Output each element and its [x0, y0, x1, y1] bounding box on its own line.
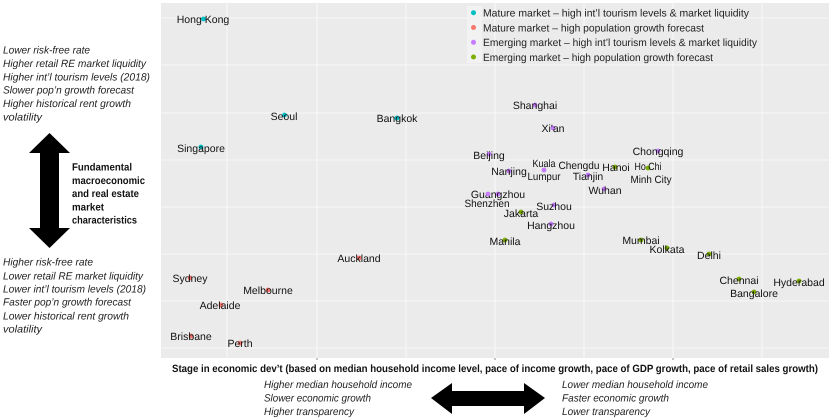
text block: lower end of vertical axis: Lower historical rent growth: [3, 310, 129, 322]
point: Xi'an: Xi'an: [541, 123, 565, 135]
point: Kuala Lumpur: Kuala: [532, 158, 556, 170]
point: Manila: Manila: [490, 236, 521, 248]
arrow: horizontal double-headed: [431, 383, 545, 414]
text block: upper end of vertical axis: Higher historical rent growth: [3, 98, 131, 110]
text block: right end of horizontal axis: [562, 379, 708, 418]
text block: upper end of vertical axis: volatility: [3, 112, 43, 124]
text block: right end of horizontal axis: Lower median household income: [562, 379, 708, 391]
point: Chennai: Chennai: [719, 275, 759, 287]
legend: Emerging market – high int’l tourism levels & market liquidity: [483, 37, 758, 49]
arrow: vertical double-headed: [29, 133, 70, 248]
point: Guangzhou: Guangzhou: [471, 189, 525, 201]
point: Perth: Perth: [227, 338, 253, 350]
text block: left end of horizontal axis: Higher median household income: [264, 379, 412, 391]
point: Seoul: Seoul: [271, 111, 297, 123]
legend: [467, 6, 758, 64]
point: Delhi: Delhi: [697, 250, 721, 262]
point: Melbourne: Melbourne: [243, 285, 293, 297]
point: Adelaide: Adelaide: [200, 300, 241, 312]
point: Nanjing: Nanjing: [491, 166, 527, 178]
text block: upper end of vertical axis: [3, 44, 150, 124]
text block: upper end of vertical axis: Slower pop’n growth forecast: [3, 84, 135, 96]
point: Ho Chi Minh City: Ho Chi: [634, 161, 662, 173]
text block: left end of horizontal axis: [264, 379, 412, 418]
point: Hong Kong: Hong Kong: [177, 14, 229, 26]
text block: vertical axis title: [72, 162, 145, 226]
point: Singapore: Singapore: [177, 143, 225, 155]
text block: lower end of vertical axis: Faster pop’n growth forecast: [3, 296, 132, 308]
text block: upper end of vertical axis: Higher int’l tourism levels (2018): [3, 72, 150, 84]
point: Beijing: Beijing: [473, 150, 505, 162]
text block: upper end of vertical axis: Higher retail RE market liquidity: [3, 58, 147, 70]
text block: upper end of vertical axis: Lower risk-free rate: [3, 44, 90, 56]
point: Ho Chi Minh City: [630, 161, 672, 186]
text block: right end of horizontal axis: Faster economic growth: [562, 392, 669, 404]
point: Brisbane: Brisbane: [170, 331, 212, 343]
text block: lower end of vertical axis: Lower int’l tourism levels (2018): [3, 284, 146, 296]
text block: lower end of vertical axis: Lower retail RE market liquidity: [3, 270, 144, 282]
point: Shenzhen: Shenzhen: [464, 198, 510, 210]
text block: vertical axis title: Fundamental: [72, 162, 132, 174]
point: Suzhou: Suzhou: [536, 201, 572, 213]
text block: vertical axis title: macroeconomic: [72, 175, 145, 187]
text block: lower end of vertical axis: volatility: [3, 324, 43, 336]
point: Hyderabad: Hyderabad: [773, 277, 825, 289]
point: Bangalore: Bangalore: [730, 288, 778, 300]
point: Kolkata: Kolkata: [649, 244, 685, 256]
point: Kuala Lumpur: Lumpur: [528, 171, 561, 183]
point: Mumbai: Mumbai: [622, 235, 660, 247]
legend: Mature market – high int’l tourism levels & market liquidity: [483, 8, 750, 20]
point: Ho Chi Minh City: Minh City: [630, 174, 672, 186]
legend: Emerging market – high population growth forecast: [483, 52, 713, 64]
point: Shenzhen: [464, 192, 510, 210]
point: Hangzhou: Hangzhou: [527, 220, 575, 232]
point: Shanghai: Shanghai: [513, 100, 557, 112]
point: Sydney: Sydney: [172, 273, 208, 285]
text block: vertical axis title: market: [72, 202, 104, 214]
text block: lower end of vertical axis: [3, 256, 146, 336]
scatter chart: [161, 3, 829, 360]
point: Chengdu: Chengdu: [558, 160, 600, 172]
legend: Mature market – high population growth forecast: [483, 22, 704, 34]
text block: right end of horizontal axis: Lower transparency: [562, 406, 651, 418]
text block: vertical axis title: characteristics: [72, 214, 137, 226]
text block: lower end of vertical axis: Higher risk-free rate: [3, 256, 93, 268]
point: Kuala Lumpur: [528, 158, 561, 183]
text block: left end of horizontal axis: Higher transparency: [264, 406, 355, 418]
point: Auckland: Auckland: [337, 253, 381, 265]
text block: left end of horizontal axis: Slower economic growth: [264, 392, 371, 404]
point: Bangkok: Bangkok: [377, 113, 418, 125]
point: Tianjin: Tianjin: [573, 171, 603, 183]
point: Jakarta: Jakarta: [504, 208, 538, 220]
point: Chongqing: Chongqing: [633, 146, 684, 158]
point: Hanoi: Hanoi: [602, 162, 630, 174]
text block: vertical axis title: and real estate: [72, 188, 139, 200]
point: Wuhan: Wuhan: [588, 185, 622, 197]
